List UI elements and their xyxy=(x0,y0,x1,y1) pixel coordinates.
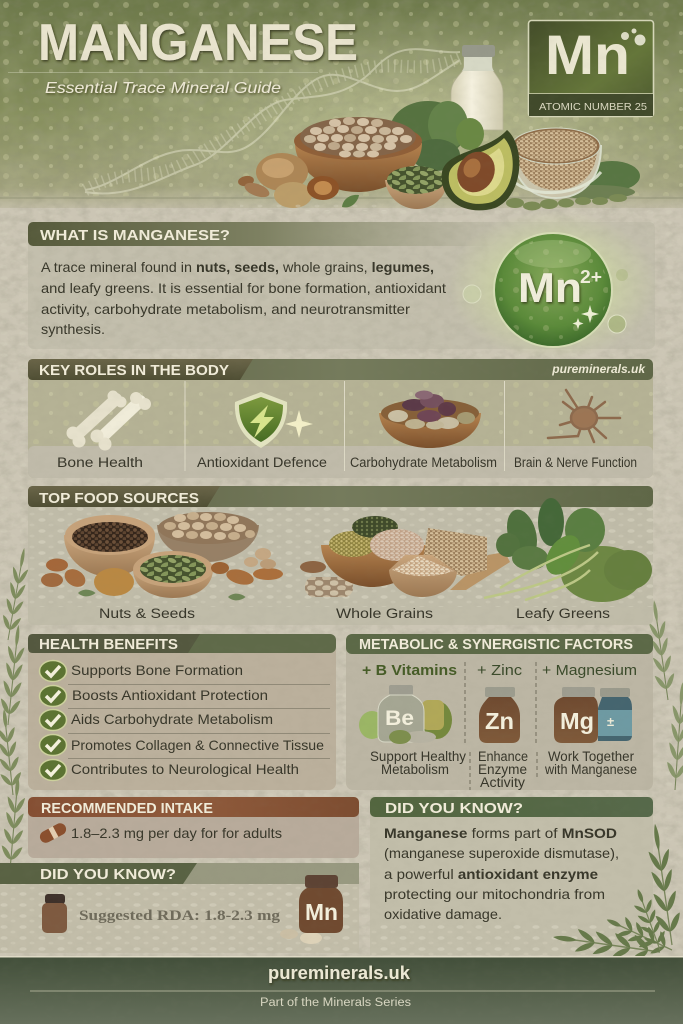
icon: neuron xyxy=(548,390,620,442)
panel: did you know right: DID YOU KNOW? xyxy=(385,800,523,817)
fact text: (manganese superoxide dismutase), xyxy=(384,845,619,861)
DNA helix xyxy=(85,49,460,194)
fact text: a powerful antioxidant enzyme xyxy=(384,866,588,882)
section header xyxy=(28,797,359,817)
pumpkin seed bowl xyxy=(385,166,447,209)
title: MANGANESE xyxy=(38,14,358,72)
plants: right border xyxy=(643,599,683,791)
panel: health benefits: HEALTH BENEFITS xyxy=(39,636,178,653)
factor captions xyxy=(370,749,637,790)
factor captions: Enhance xyxy=(478,749,528,764)
factor captions: with Manganese xyxy=(544,762,637,777)
element tile: Mn xyxy=(528,20,654,116)
fact text: oxidative damage. xyxy=(384,906,502,922)
footer site name: pureminerals.uk xyxy=(268,963,411,983)
section header xyxy=(346,634,653,654)
greens behind bowls xyxy=(390,101,640,199)
description text: and leafy greens. It is essential for bone formation, antioxidant xyxy=(41,280,446,296)
benefit: Contributes to Neurological Health: Contributes to Neurological Health xyxy=(71,761,299,777)
icon: Mn2+ orb xyxy=(448,210,658,360)
panel: did you know right xyxy=(370,797,653,955)
header band background xyxy=(0,0,683,208)
icon: shield xyxy=(235,392,313,448)
section header xyxy=(28,359,253,380)
benefit: Boosts Antioxidant Protection xyxy=(40,686,268,706)
footer xyxy=(0,956,683,1024)
panel: key roles in the body: KEY ROLES IN THE BODY xyxy=(39,362,229,379)
section header xyxy=(28,634,200,653)
intake text: 1.8–2.3 mg per day for for adults xyxy=(71,825,282,841)
role labels: Bone Health xyxy=(57,455,143,470)
icon: Mn2+ orb: 2+ xyxy=(580,267,602,287)
element tile: Mn: ATOMIC NUMBER 25 xyxy=(539,101,647,113)
section header xyxy=(370,797,653,817)
icon: B vitamins bottle: Be xyxy=(385,707,414,730)
panel: health benefits xyxy=(28,634,336,790)
icon: magnesium bottles: ± xyxy=(607,714,614,729)
benefit: Supports Bone Formation xyxy=(40,660,243,682)
panel: what is manganese: WHAT IS MANGANESE? xyxy=(40,227,230,244)
plants: left border xyxy=(0,546,34,871)
icon: zinc bottle xyxy=(479,687,520,743)
icon: bean bowl xyxy=(379,390,481,448)
panel: top food sources: Whole Grains xyxy=(336,606,433,621)
RDA text: Suggested RDA: 1.8-2.3 mg xyxy=(79,908,281,924)
icon: capsule xyxy=(38,821,68,845)
panel: metabolic and synergistic factors: + Magnesium xyxy=(542,662,637,679)
panel: top food sources xyxy=(28,486,653,625)
panel: top food sources: Leafy Greens xyxy=(516,606,610,621)
section header xyxy=(0,863,197,884)
panel: recommended intake xyxy=(28,797,359,858)
plant: bottom right herb xyxy=(551,822,683,967)
description text: synthesis. xyxy=(41,321,105,337)
benefit: Contributes to Neurological Health xyxy=(40,760,299,780)
bean bowl xyxy=(294,117,422,192)
subtitle: Essential Trace Mineral Guide xyxy=(45,80,281,97)
icon: milk bottle xyxy=(451,45,503,130)
benefit: Aids Carbohydrate Metabolism xyxy=(40,710,273,730)
fact text: protecting our mitochondria from xyxy=(384,886,605,902)
factor captions: Support Healthy xyxy=(370,749,466,764)
factor captions: Work Together xyxy=(548,749,634,764)
benefit: Promotes Collagen: Promotes Collagen & Connective Tissue xyxy=(71,737,324,753)
icon: magnesium bottles xyxy=(554,687,632,743)
benefit: Supports Bone Formation: Supports Bone Formation xyxy=(71,662,243,678)
food: nuts and seeds xyxy=(41,512,283,600)
icon: bones xyxy=(67,391,150,450)
description text: A trace mineral found in nuts, seeds, whole grains, legumes, xyxy=(41,259,432,275)
section header xyxy=(28,486,220,507)
food illustration: header xyxy=(237,45,640,211)
factor captions: Metabolism xyxy=(381,762,449,777)
panel: top food sources: TOP FOOD SOURCES xyxy=(39,490,199,507)
factor labels: + B Vitamins xyxy=(362,662,457,679)
benefit: Boosts Antioxidant Protection: Boosts Antioxidant Protection xyxy=(72,687,268,703)
site tag: pureminerals.uk xyxy=(551,362,646,376)
fact text: Manganese forms part of MnSOD xyxy=(384,825,612,841)
panel: metabolic and synergistic factors xyxy=(346,634,653,790)
food: whole grains xyxy=(300,516,510,597)
panel: key roles in the body: Carbohydrate Metabolism xyxy=(350,455,497,470)
glass bowl of grains xyxy=(512,128,601,198)
icon: magnesium bottles: Mg xyxy=(560,708,594,734)
icon: zinc bottle: Zn xyxy=(485,708,514,734)
ground seeds xyxy=(240,194,627,211)
panel: did you know left: DID YOU KNOW? xyxy=(40,866,176,883)
title rule xyxy=(8,72,318,73)
panel: key roles in the body: Brain & Nerve Function xyxy=(514,455,637,470)
icon: Mn bottle: Mn xyxy=(305,899,338,925)
factor captions: Activity xyxy=(480,775,525,790)
food: leafy greens xyxy=(484,498,652,602)
benefit: Aids Carbohydrate Metabolism: Aids Carbohydrate Metabolism xyxy=(71,711,273,727)
avocado xyxy=(442,130,519,210)
panel: key roles in the body: Antioxidant Defence xyxy=(197,455,327,470)
factor captions: Enzyme xyxy=(478,762,527,777)
footer series note: Part of the Minerals Series xyxy=(260,997,411,1009)
icon: Mn bottle xyxy=(280,875,343,944)
benefit: Promotes Collagen xyxy=(40,734,324,756)
panel: metabolic and synergistic factors: METABOLIC & SYNERGISTIC FACTORS xyxy=(359,636,633,653)
panel: key roles in the body xyxy=(28,359,653,478)
walnuts and almonds xyxy=(237,153,362,211)
panel: did you know left xyxy=(0,863,359,953)
panel: recommended intake: RECOMMENDED INTAKE xyxy=(41,800,213,817)
icon: B vitamins bottle xyxy=(359,685,452,744)
panel: metabolic and synergistic factors: + Zinc xyxy=(477,662,523,679)
icon: Mn2+ orb: Mn xyxy=(518,264,582,311)
food labels: Nuts & Seeds xyxy=(99,606,195,621)
element tile: Mn: Mn xyxy=(545,23,630,86)
icon: small bottle xyxy=(42,894,67,933)
description text: activity, carbohydrate metabolism, and neurotransmitter xyxy=(41,301,410,317)
panel: what is manganese xyxy=(28,222,655,349)
